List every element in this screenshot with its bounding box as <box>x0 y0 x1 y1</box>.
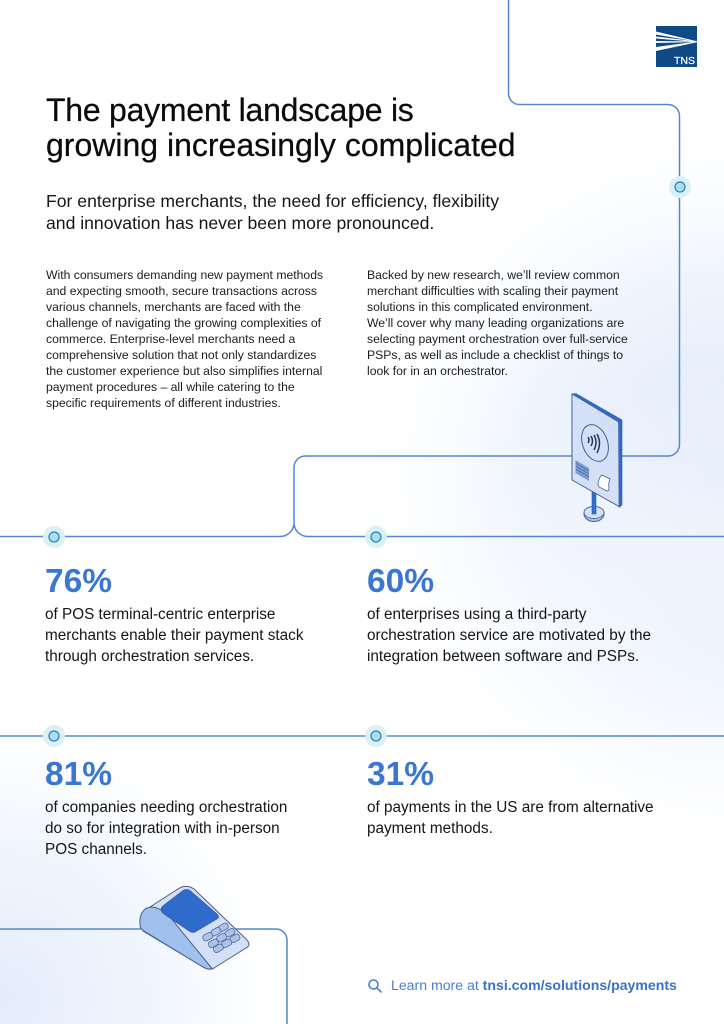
description: orchestration service are motivated by the <box>367 627 651 644</box>
description: POS channels. <box>45 841 147 858</box>
description: through orchestration services. <box>45 648 254 665</box>
text block: intro left: the customer experience but also simplifies internal <box>46 364 322 378</box>
description: payment methods. <box>367 820 493 837</box>
description <box>367 799 654 837</box>
percentage: 76% <box>45 563 112 600</box>
text block: intro left: comprehensive solution that not only standardizes <box>46 348 316 362</box>
description: of payments in the US are from alternative <box>367 799 654 816</box>
stat: 31% <box>365 725 654 837</box>
text block: intro right <box>367 268 628 378</box>
icon: handheld card terminal <box>139 886 250 970</box>
text block: intro left: With consumers demanding new payment methods <box>46 268 323 282</box>
stat: 81% <box>43 725 287 858</box>
title: growing increasingly complicated <box>46 127 516 163</box>
text block: intro right: look for in an orchestrator. <box>367 364 508 378</box>
description <box>367 606 651 665</box>
percentage: 60% <box>367 563 434 600</box>
text block: intro right: solutions in this complicated environment. <box>367 300 593 314</box>
subtitle <box>46 191 499 233</box>
text block: intro left: specific requirements of different industries. <box>46 396 281 410</box>
icon: contactless payment terminal <box>571 393 622 522</box>
description: merchants enable their payment stack <box>45 627 303 644</box>
description: do so for integration with in-person <box>45 820 280 837</box>
percentage: 31% <box>367 756 434 793</box>
description: integration between software and PSPs. <box>367 648 639 665</box>
text block: intro left: commerce. Enterprise-level merchants need a <box>46 332 295 346</box>
node marker: right line <box>669 176 691 198</box>
text block: intro left: challenge of navigating the growing complexities of <box>46 316 321 330</box>
text block: intro right: merchant difficulties with scaling their payment <box>367 284 618 298</box>
text block: intro right: We’ll cover why many leading organizations are <box>367 316 624 330</box>
node marker <box>43 725 65 747</box>
description <box>45 799 287 858</box>
logo: TNS <box>656 26 697 67</box>
description: of enterprises using a third-party <box>367 606 586 623</box>
node marker <box>43 526 65 548</box>
stat: 76% <box>43 526 304 665</box>
description: of POS terminal-centric enterprise <box>45 606 275 623</box>
subtitle: For enterprise merchants, the need for efficiency, flexibility <box>46 191 499 211</box>
description <box>45 606 304 665</box>
text block: intro left: payment procedures – all while catering to the <box>46 380 295 394</box>
text block: intro left: and expecting smooth, secure transactions across <box>46 284 317 298</box>
description: of companies needing orchestration <box>45 799 287 816</box>
text block: intro right: PSPs, as well as include a checklist of things to <box>367 348 623 362</box>
title: The payment landscape is <box>46 92 414 128</box>
text block: intro left <box>46 268 323 410</box>
node marker <box>365 725 387 747</box>
subtitle: and innovation has never been more pronounced. <box>46 213 434 233</box>
text block: intro right: Backed by new research, we’ll review common <box>367 268 620 282</box>
node marker <box>365 526 387 548</box>
call to action link text: Learn more at tnsi.com/solutions/payments <box>391 977 677 993</box>
title <box>46 92 516 163</box>
text block: intro right: selecting payment orchestration over full-service <box>367 332 628 346</box>
logo: TNS: TNS <box>674 55 695 67</box>
stat: 60% <box>365 526 651 665</box>
icon: magnifying glass <box>368 979 382 994</box>
text block: intro left: various channels, merchants are faced with the <box>46 300 301 314</box>
percentage: 81% <box>45 756 112 793</box>
